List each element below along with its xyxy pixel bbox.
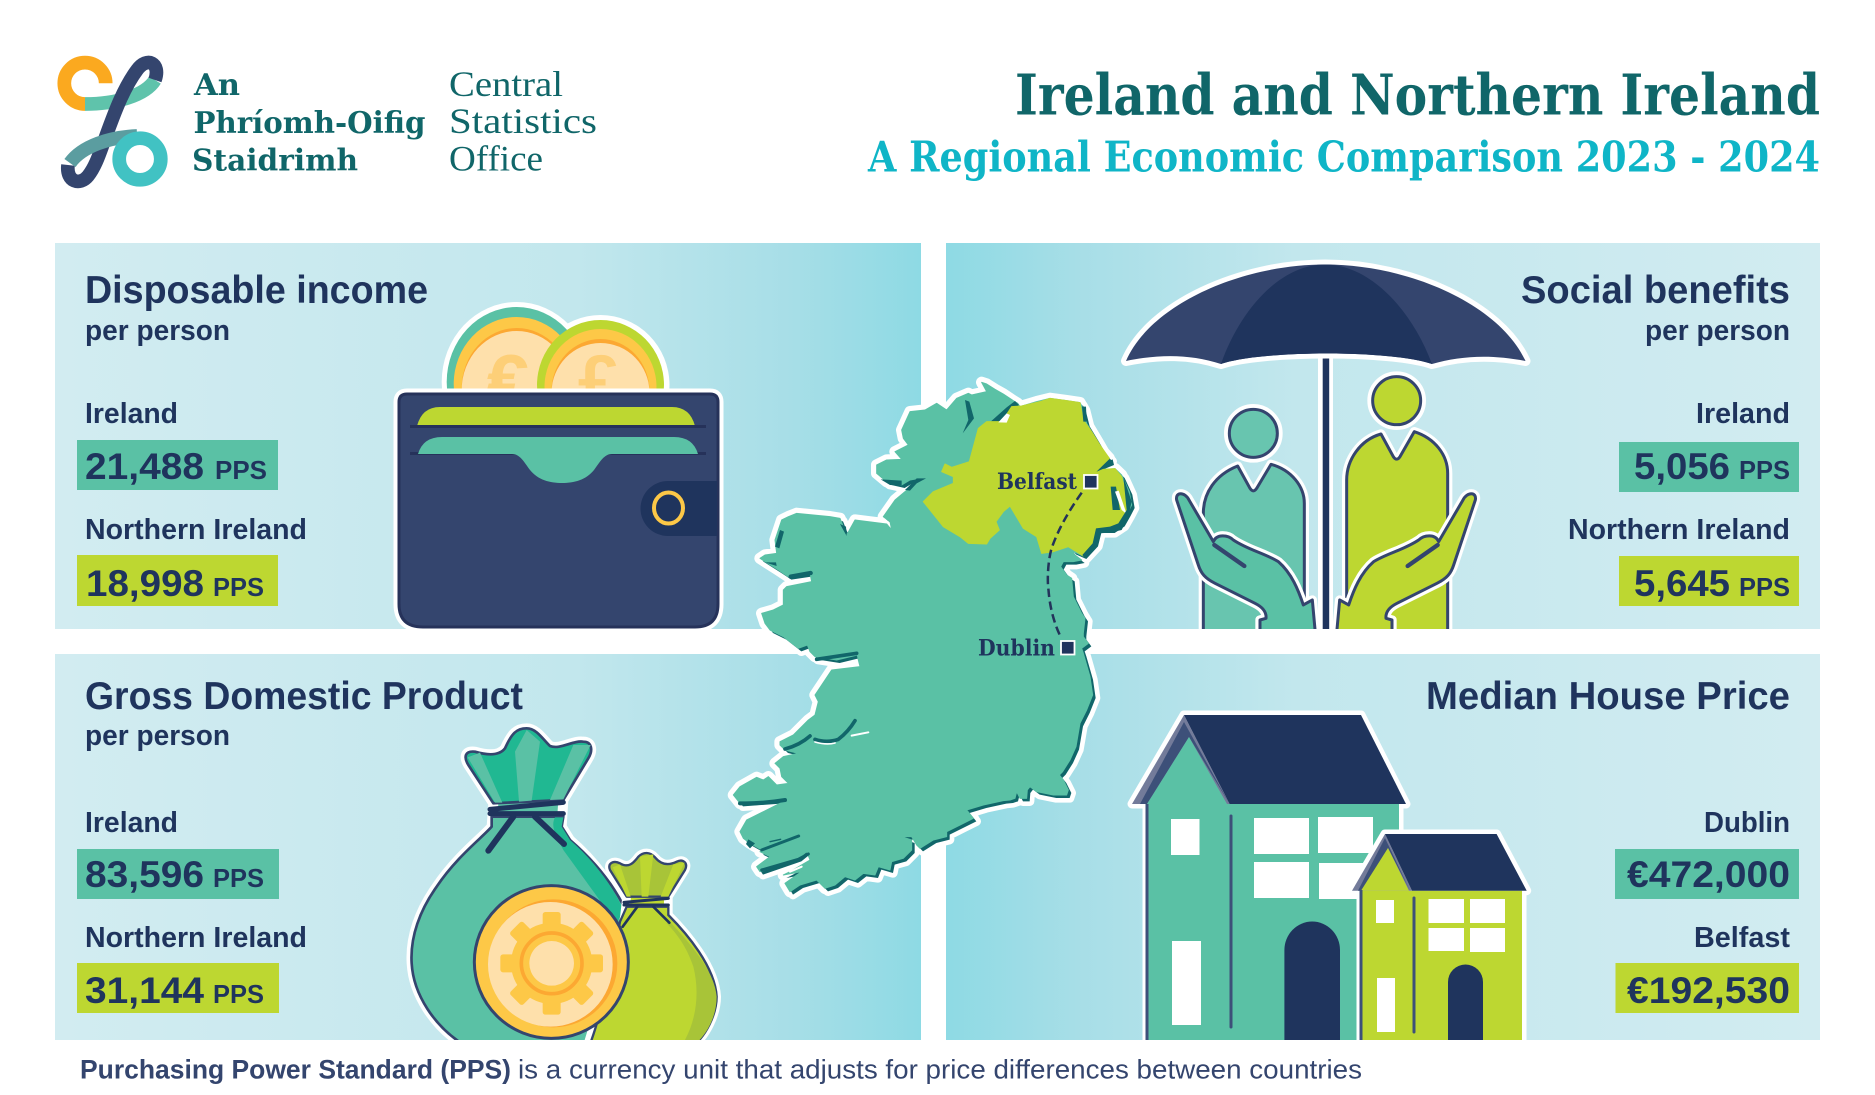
map: dashed route Belfast to Dublin [1048, 493, 1082, 637]
panel content: social benefits text: PPS [1739, 455, 1790, 485]
icon: large teal house [1132, 715, 1406, 1050]
footer note: Purchasing Power Standard: is a currency unit that adjusts for price differences between countries [518, 1054, 1362, 1084]
panel content: GDP text: 31,144 [85, 970, 204, 1011]
icon: right person [1347, 377, 1448, 637]
map: Belfast marker: Belfast [997, 469, 1078, 495]
panel content: disposable income text [77, 269, 428, 606]
panel content: disposable income text: per person [85, 315, 230, 347]
icon: small money bag [587, 853, 717, 1048]
map of Ireland [733, 382, 1135, 895]
icon: left person [1203, 409, 1304, 637]
icon: gear [500, 912, 603, 1015]
logo text: English name [449, 64, 597, 178]
logo text: Irish name [192, 68, 426, 178]
icon: umbrella canopy [1126, 264, 1526, 364]
panel content: social benefits text: 5,056 [1634, 446, 1730, 487]
panel: gross domestic product background [55, 654, 921, 1040]
panel content: social benefits text: Northern Ireland [1568, 514, 1790, 546]
logo: CSO infinity mark [64, 63, 161, 181]
panel content: disposable income text: 18,998 [86, 563, 204, 604]
panel content: GDP text: Ireland [85, 807, 178, 839]
icon: umbrella with two people [1126, 264, 1526, 640]
footer note: Purchasing Power Standard [80, 1054, 1362, 1084]
icon: money bags and coin [411, 728, 717, 1048]
panel: median house price background [946, 654, 1820, 1040]
panel content: median house price text [1426, 675, 1799, 1013]
logo text: Irish name: Staidrimh [192, 144, 358, 178]
panel content: disposable income text: Ireland [85, 398, 178, 430]
map: Northern Ireland [923, 398, 1132, 558]
logo text: English name: Central [449, 64, 563, 104]
panel content: social benefits text: Social benefits [1521, 269, 1790, 312]
panel content: median house price text: €192,530 [1627, 970, 1790, 1011]
panel content: GDP text: per person [85, 720, 230, 752]
icon: wallet body [399, 394, 718, 627]
panel content: disposable income text: Northern Ireland [85, 514, 307, 546]
panel: disposable income background [55, 243, 921, 629]
panel content: median house price text: Median House Price [1426, 675, 1790, 718]
icon: teal card with notch [418, 437, 698, 483]
icon: houses [1132, 715, 1527, 1050]
panel content: social benefits text: per person [1645, 315, 1790, 347]
icon: umbrella pole [1318, 350, 1333, 640]
panel content: median house price text: €472,000 [1627, 854, 1790, 895]
footer note: Purchasing Power Standard: Purchasing Power Standard (PPS) [80, 1054, 511, 1084]
icon: lime card [417, 407, 695, 426]
panel content: social benefits text [1521, 269, 1799, 606]
icon: left hand [1176, 494, 1316, 637]
map: Dublin marker: Dublin [978, 636, 1055, 662]
icon: wallet with coins [399, 302, 718, 627]
icon: euro and pound coins: € [487, 340, 529, 425]
panel content: disposable income text: 21,488 [85, 446, 204, 487]
icon: large money bag [411, 728, 633, 1048]
panel content: disposable income text: Disposable income [85, 269, 428, 312]
panel content: GDP text: Northern Ireland [85, 922, 307, 954]
panel content: median house price text: Belfast [1694, 922, 1790, 954]
panel content: social benefits text: PPS [1739, 572, 1790, 602]
icon: clasp ring [654, 492, 683, 524]
logo text: Irish name: Phríomh-Oifig [194, 106, 426, 141]
map: sea inlets [746, 400, 1120, 848]
icon: euro and pound coins: £ [578, 340, 620, 425]
icon: euro and pound coins [442, 302, 670, 388]
panel content: GDP text: 83,596 [85, 854, 204, 895]
logo text: English name: Statistics [449, 101, 597, 141]
panel: social benefits background [946, 243, 1820, 629]
logo text: Irish name: An [193, 68, 240, 103]
panel content: social benefits text: Ireland [1696, 398, 1790, 430]
panel content: disposable income text: PPS [213, 572, 264, 602]
icon: gear coin [474, 886, 628, 1038]
panel content: GDP text: Gross Domestic Product [85, 675, 523, 718]
panel content: GDP text: PPS [213, 979, 264, 1009]
icon: right hand [1336, 494, 1476, 637]
panel content: social benefits text: 5,645 [1634, 563, 1730, 604]
icon: small lime house [1352, 834, 1527, 1050]
panel content: GDP text: PPS [213, 863, 264, 893]
icon: wallet clasp [640, 481, 717, 536]
map: island outline and shadow [733, 382, 1135, 895]
panel content: GDP text [77, 675, 523, 1013]
panel content: median house price text: Dublin [1704, 807, 1790, 839]
panel content: disposable income text: PPS [215, 455, 267, 485]
logo text: English name: Office [449, 138, 543, 178]
icon: people and hands [1176, 377, 1476, 637]
